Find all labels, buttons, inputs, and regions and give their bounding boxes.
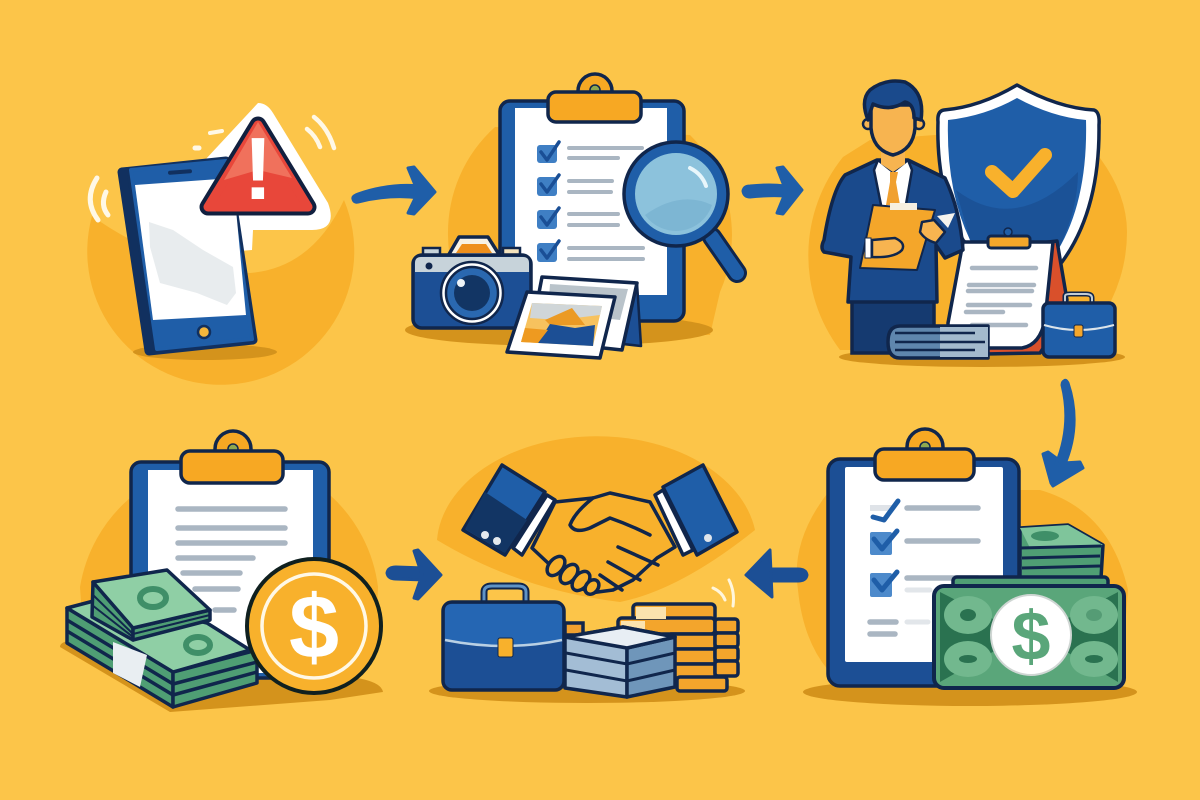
ground shadow — [60, 640, 383, 712]
orange clipboard — [860, 205, 935, 270]
icon: shield — [938, 85, 1099, 300]
panel: report the incident on a phone — [87, 103, 354, 385]
icon: adjuster figure — [822, 81, 963, 353]
icon: cash stack — [953, 525, 1108, 589]
icon: camera — [413, 237, 531, 328]
neck and face — [881, 150, 905, 172]
shirt and tie — [874, 160, 912, 210]
icon: warning triangle: ! — [243, 119, 273, 218]
icon: approved clipboard — [828, 429, 1019, 686]
backdrop blob — [797, 490, 1128, 670]
left cuff and sleeve — [513, 495, 555, 555]
panel: settlement approval and cash — [797, 429, 1137, 706]
ground shadow — [839, 347, 1125, 367]
icon: checklist clipboard — [500, 74, 684, 321]
backdrop circle — [808, 130, 1127, 350]
icon: briefcase — [1043, 294, 1115, 357]
icon: banknote — [934, 586, 1124, 688]
arrow: step 1 to step 2 — [353, 167, 435, 214]
panel: agreement handshake — [429, 436, 755, 703]
icon: cash bundles — [67, 570, 257, 707]
ground shadow — [803, 678, 1137, 706]
arrow: step 3 to step 4 — [1043, 380, 1083, 486]
hands — [532, 493, 675, 593]
text lines — [569, 148, 643, 259]
icon: dollar coin: $ — [289, 578, 339, 678]
panel: final payment — [60, 431, 383, 712]
checkmarks — [870, 501, 898, 597]
vibration marks — [90, 117, 334, 220]
paper band — [113, 642, 147, 687]
shine marks — [713, 580, 734, 606]
right cuff and sleeve — [655, 490, 693, 555]
icon: paper stack — [565, 627, 675, 697]
ground shadow — [429, 679, 745, 703]
icon: smartphone — [122, 161, 253, 351]
backdrop shape — [437, 436, 755, 602]
upper bundle — [92, 582, 133, 640]
corner ornaments — [940, 592, 1118, 682]
icon: photo prints — [507, 277, 641, 358]
icon: banknote: $ — [1012, 597, 1050, 675]
icon: payment clipboard — [131, 431, 329, 678]
icon: handshake — [463, 465, 737, 597]
icon: warning triangle — [208, 119, 308, 218]
text lines — [870, 508, 978, 634]
icon: dollar coin — [247, 559, 381, 693]
panel: adjuster reviews the coverage — [808, 81, 1127, 367]
checkboxes — [537, 142, 559, 262]
text lines — [178, 509, 285, 610]
ground shadow — [133, 344, 277, 360]
arrow: step 2 to step 3 — [743, 167, 802, 214]
jacket — [822, 160, 963, 302]
icon: book — [888, 326, 988, 358]
icon: magnifying glass — [624, 142, 737, 273]
panel: inspect and document the damage — [405, 74, 737, 358]
icon: briefcase — [443, 586, 564, 690]
legs — [852, 300, 934, 353]
ground shadow — [405, 314, 713, 346]
backdrop circle — [80, 495, 378, 660]
icon: gold coin stacks — [565, 604, 738, 691]
hair — [864, 81, 922, 120]
hands — [872, 238, 903, 257]
white alert halo — [205, 103, 331, 252]
icon: policy document — [948, 228, 1067, 354]
lower bundle — [67, 608, 173, 707]
backdrop circle — [448, 127, 732, 335]
arrow: step 5 to step 6 — [387, 550, 441, 599]
backdrop circle — [87, 200, 354, 385]
arrow: step 4 to step 5 — [746, 550, 807, 597]
